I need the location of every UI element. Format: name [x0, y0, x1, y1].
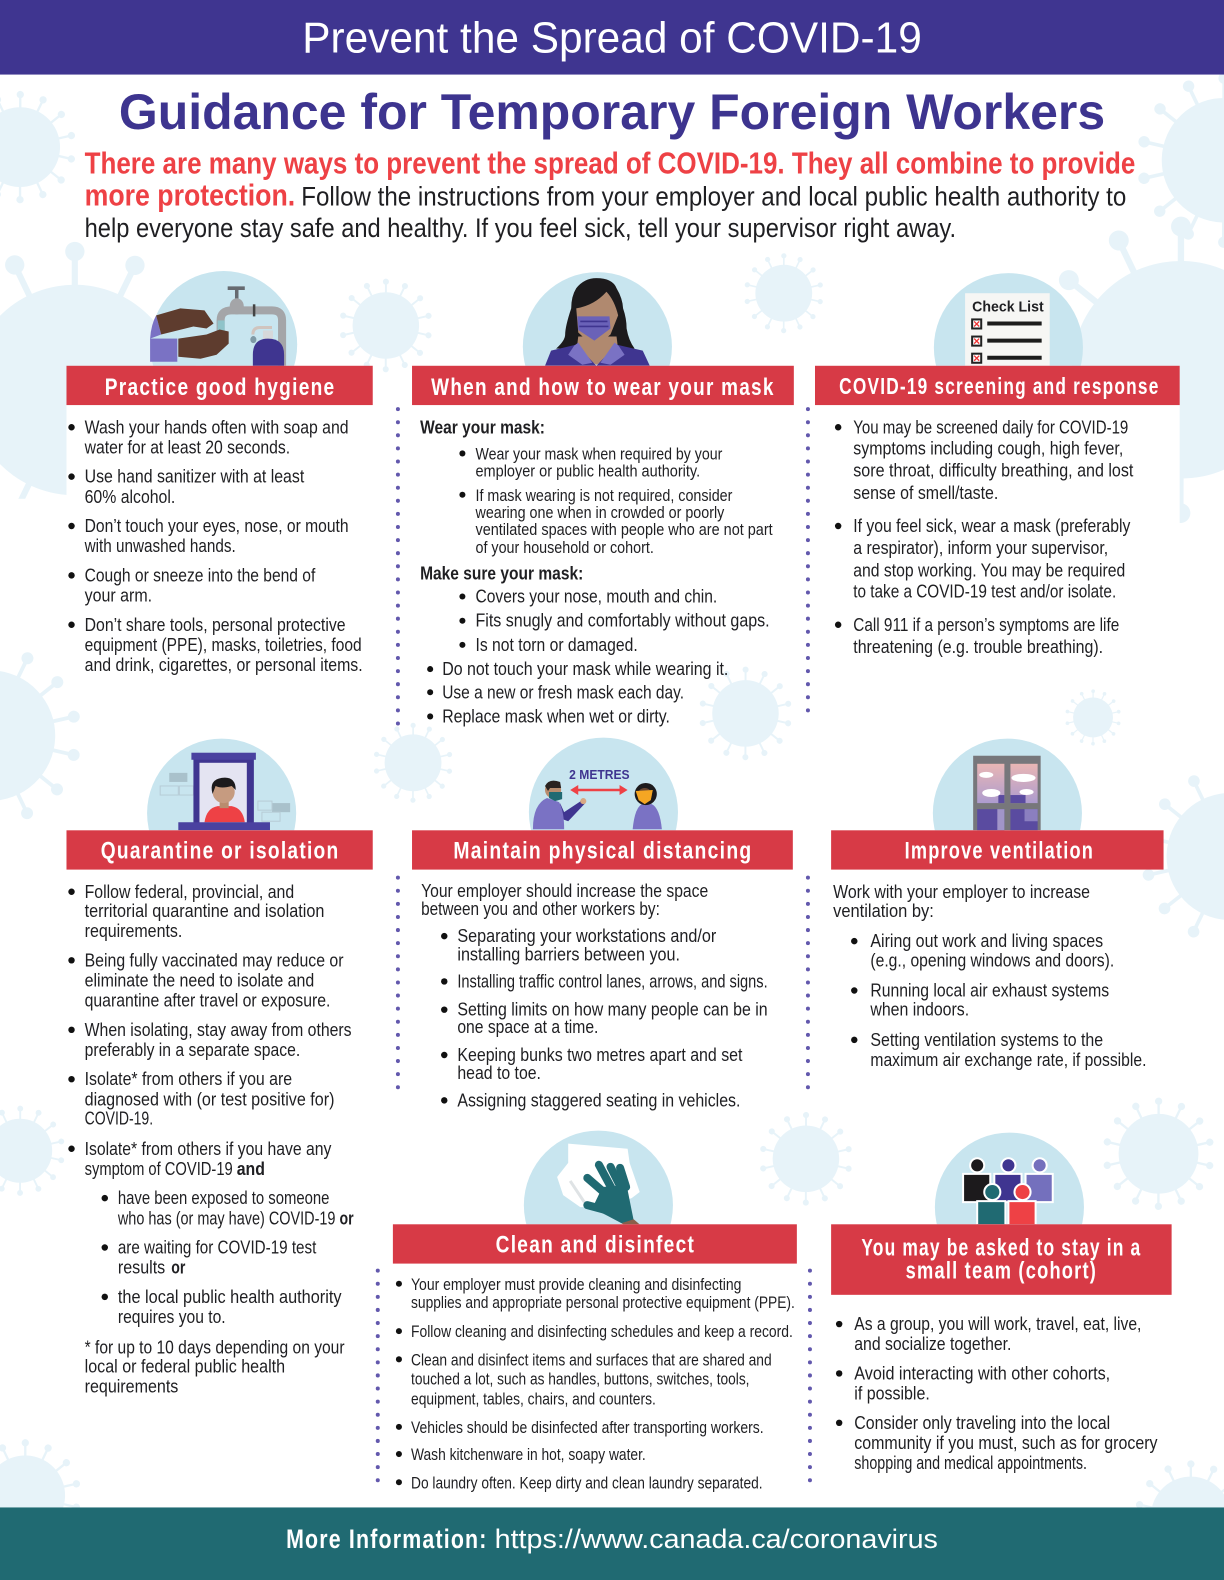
bullets: screening: symptoms including cough, high fever,: [853, 438, 1123, 458]
bullets: mask: Wear your mask:: [420, 417, 545, 437]
bullets: distancing: Separating your workstations and/or: [457, 926, 716, 946]
bullets: ventilation: ventilation by:: [833, 901, 934, 921]
icon: woman wearing mask: [522, 272, 672, 366]
bullets: cleaning: [396, 1275, 795, 1492]
heading: clean and disinfect: Clean and disinfect: [496, 1232, 695, 1259]
bullets: cohort: if possible.: [854, 1384, 930, 1404]
bullets: screening: Call 911 if a person’s symptoms are life: [853, 615, 1119, 635]
heading: maintain physical distancing: Maintain physical distancing: [453, 838, 753, 865]
bullets: screening: You may be screened daily for COVID-19: [853, 417, 1128, 437]
bullets: cleaning: Wash kitchenware in hot, soapy water.: [411, 1445, 646, 1464]
icon: gloved hand with wipe: [524, 1130, 673, 1224]
bullets: cohort: [836, 1314, 1158, 1473]
bullets: quarantine: or: [339, 1208, 354, 1228]
bullets: quarantine: requirements: [85, 1377, 178, 1397]
bullets: cleaning: Clean and disinfect items and surfaces that are shared and: [411, 1350, 772, 1369]
bullets: quarantine: requires you to.: [118, 1307, 226, 1327]
bullets: hygiene: Wash your hands often with soap and: [85, 417, 349, 437]
bullets: screening: [835, 417, 1133, 657]
icon: two people two metres apart: [528, 738, 678, 830]
bullets: quarantine: have been exposed to someone: [118, 1188, 329, 1208]
panel: cohort: [831, 1224, 1172, 1473]
heading: quarantine or isolation: [66, 830, 373, 870]
bullets: quarantine: results: [118, 1258, 165, 1278]
bullets: screening: to take a COVID-19 test and/or isolate.: [853, 582, 1116, 602]
bullets: cleaning: touched a lot, such as handles, buttons, switches, tools,: [411, 1370, 750, 1389]
bullets: distancing: head to toe.: [457, 1063, 541, 1083]
bullets: mask: Use a new or fresh mask each day.: [442, 682, 684, 702]
bullets: ventilation: (e.g., opening windows and doors).: [870, 950, 1114, 970]
bullets: distancing: between you and other workers by:: [421, 899, 660, 919]
bullets: quarantine: symptom of COVID-19: [85, 1159, 233, 1179]
bullets: quarantine: eliminate the need to isolate and: [85, 970, 314, 990]
bullets: distancing: Keeping bunks two metres apart and set: [457, 1045, 742, 1065]
intro text: more protection.: [85, 180, 295, 213]
panel: ventilation: [831, 830, 1164, 1070]
bullets: mask: Fits snugly and comfortably without gaps.: [475, 611, 770, 631]
bullets: hygiene: 60% alcohol.: [85, 487, 175, 507]
heading: maintain physical distancing: [412, 830, 793, 870]
bullets: quarantine: When isolating, stay away from others: [85, 1020, 352, 1040]
bullets: screening: a respirator), inform your supervisor,: [853, 538, 1108, 558]
main title: Guidance for Temporary Foreign Workers: [119, 83, 1105, 140]
bullets: quarantine: and: [237, 1159, 265, 1179]
bullets: ventilation: Airing out work and living spaces: [870, 931, 1103, 951]
bullets: cleaning: supplies and appropriate personal protective equipment (PPE).: [411, 1293, 795, 1312]
bullets: mask: of your household or cohort.: [475, 538, 654, 557]
bullets: mask: Replace mask when wet or dirty.: [442, 706, 670, 726]
heading: improve ventilation: [831, 830, 1164, 870]
bullets: ventilation: [833, 882, 1146, 1070]
bullets: cleaning: Follow cleaning and disinfecting schedules and keep a record.: [411, 1322, 793, 1341]
bullets: hygiene: equipment (PPE), masks, toiletries, food: [85, 635, 362, 655]
bullets: quarantine: Being fully vaccinated may reduce or: [85, 950, 344, 970]
bullets: mask: Covers your nose, mouth and chin.: [475, 587, 717, 607]
heading: when and how to wear your mask: [412, 366, 794, 405]
bullets: quarantine: Isolate* from others if you have any: [85, 1139, 332, 1159]
bullets: quarantine: COVID-19.: [85, 1109, 153, 1129]
bullets: cohort: shopping and medical appointments.: [854, 1453, 1087, 1473]
bullets: quarantine: Follow federal, provincial, and: [85, 882, 294, 902]
top banner: [0, 0, 1224, 75]
bullets: screening: sense of smell/taste.: [853, 483, 998, 503]
bullets: cleaning: Vehicles should be disinfected after transporting workers.: [411, 1418, 764, 1437]
bullets: quarantine: [68, 882, 354, 1397]
bullets: hygiene: water for at least 20 seconds.: [84, 437, 290, 457]
bullets: cohort: community if you must, such as for grocery: [854, 1433, 1158, 1453]
bullets: quarantine: * for up to 10 days depending on your: [85, 1337, 345, 1357]
icon: person at window: [147, 738, 296, 830]
bullets: cleaning: Your employer must provide cleaning and disinfecting: [411, 1275, 741, 1294]
footer: [0, 1507, 1224, 1580]
bullets: quarantine: are waiting for COVID-19 test: [118, 1238, 316, 1258]
heading: when and how to wear your mask: When and how to wear your mask: [431, 374, 775, 401]
bullets: mask: Is not torn or damaged.: [475, 635, 638, 655]
bullets: cohort: Avoid interacting with other cohorts,: [854, 1363, 1110, 1383]
bullets: mask: wearing one when in crowded or poorly: [475, 503, 725, 522]
bullets: quarantine: territorial quarantine and isolation: [85, 901, 324, 921]
intro text: help everyone stay safe and healthy. If you feel sick, tell your supervisor right away.: [85, 212, 956, 243]
bullets: screening: sore throat, difficulty breathing, and lost: [853, 461, 1133, 481]
footer: More Information:: [286, 1523, 488, 1554]
bullets: hygiene: Don’t touch your eyes, nose, or mouth: [85, 516, 349, 536]
icon: check list: Check List: [972, 299, 1044, 315]
bullets: hygiene: and drink, cigarettes, or personal items.: [85, 655, 363, 675]
heading: practice good hygiene: Practice good hygiene: [105, 374, 335, 401]
bullets: quarantine: the local public health authority: [118, 1287, 342, 1307]
bullets: quarantine: diagnosed with (or test positive for): [85, 1089, 334, 1109]
bullets: distancing: Assigning staggered seating in vehicles.: [457, 1090, 740, 1110]
bullets: cohort: As a group, you will work, travel, eat, live,: [854, 1314, 1141, 1334]
bullets: ventilation: Work with your employer to increase: [833, 882, 1090, 902]
bullets: hygiene: Use hand sanitizer with at least: [85, 467, 304, 487]
bullets: ventilation: maximum air exchange rate, if possible.: [870, 1050, 1146, 1070]
bullets: distancing: installing barriers between you.: [457, 944, 680, 964]
panel: mask: [412, 366, 794, 726]
panel: physical distancing: [412, 830, 793, 1110]
heading: stay in a small team: [831, 1224, 1172, 1295]
bullets: quarantine: local or federal public health: [85, 1356, 285, 1376]
intro text: [85, 147, 1135, 243]
panel: quarantine: [66, 830, 373, 1397]
bullets: ventilation: when indoors.: [870, 1000, 969, 1020]
icon: cohort of people: [934, 1132, 1084, 1224]
bullets: ventilation: Setting ventilation systems to the: [870, 1030, 1103, 1050]
bullets: mask: ventilated spaces with people who are not part: [475, 520, 773, 539]
bullets: mask: Wear your mask when required by your: [475, 444, 723, 463]
bullets: mask: Do not touch your mask while wearing it.: [442, 659, 728, 679]
bullets: cleaning: Do laundry often. Keep dirty and clean laundry separated.: [411, 1473, 763, 1492]
bullets: quarantine: requirements.: [85, 921, 182, 941]
icon: window: [932, 738, 1082, 830]
bullets: mask: employer or public health authority.: [475, 462, 700, 481]
bullets: distancing: Installing traffic control lanes, arrows, and signs.: [457, 971, 768, 992]
heading: covid-19 screening and response: [815, 366, 1180, 405]
icon: check list: [934, 273, 1083, 366]
icon: two people two metres apart: 2 METRES: [569, 767, 630, 782]
bullets: quarantine: preferably in a separate space.: [85, 1040, 300, 1060]
bullets: screening: If you feel sick, wear a mask (preferably: [853, 516, 1131, 536]
bullets: mask: [420, 417, 773, 726]
heading: clean and disinfect: [393, 1224, 797, 1264]
panel: clean and disinfect: [393, 1224, 797, 1492]
panel: screening: [815, 366, 1180, 657]
heading: quarantine or isolation: Quarantine or isolation: [101, 838, 339, 865]
bullets: screening: and stop working. You may be required: [853, 560, 1125, 580]
bullets: quarantine: or: [171, 1258, 185, 1278]
bullets: hygiene: with unwashed hands.: [84, 536, 236, 556]
icon: washing hands at tap: [150, 271, 298, 366]
bullets: mask: If mask wearing is not required, consider: [475, 486, 733, 505]
intro text: Follow the instructions from your employer and local public health authority to: [301, 181, 1126, 212]
bullets: distancing: [421, 881, 768, 1110]
bullets: hygiene: your arm.: [85, 586, 152, 606]
bullets: distancing: Setting limits on how many people can be in: [457, 1000, 768, 1020]
panel: practice good hygiene: [66, 366, 373, 675]
footer: https://www.canada.ca/coronavirus: [495, 1523, 938, 1554]
bullets: distancing: one space at a time.: [457, 1017, 598, 1037]
top banner: Prevent the Spread of COVID-19: [302, 14, 922, 62]
bullets: ventilation: Running local air exhaust systems: [870, 981, 1109, 1001]
bullets: quarantine: quarantine after travel or exposure.: [85, 991, 330, 1011]
bullets: quarantine: Isolate* from others if you are: [85, 1069, 292, 1089]
bullets: mask: Make sure your mask:: [420, 563, 583, 583]
bullets: cohort: and socialize together.: [854, 1334, 1011, 1354]
heading: improve ventilation: Improve ventilation: [905, 838, 1094, 865]
bullets: screening: threatening (e.g. trouble breathing).: [853, 637, 1103, 657]
heading: stay in a small team: small team (cohort): [906, 1258, 1097, 1285]
bullets: distancing: Your employer should increase the space: [421, 881, 708, 901]
bullets: cohort: Consider only traveling into the local: [854, 1413, 1110, 1433]
bullets: quarantine: who has (or may have) COVID-19: [117, 1208, 335, 1228]
bullets: hygiene: [68, 417, 363, 675]
bullets: hygiene: Don’t share tools, personal protective: [85, 615, 346, 635]
bullets: hygiene: Cough or sneeze into the bend of: [85, 565, 316, 585]
heading: practice good hygiene: [66, 366, 373, 405]
bullets: cleaning: equipment, tables, chairs, and counters.: [411, 1390, 656, 1409]
